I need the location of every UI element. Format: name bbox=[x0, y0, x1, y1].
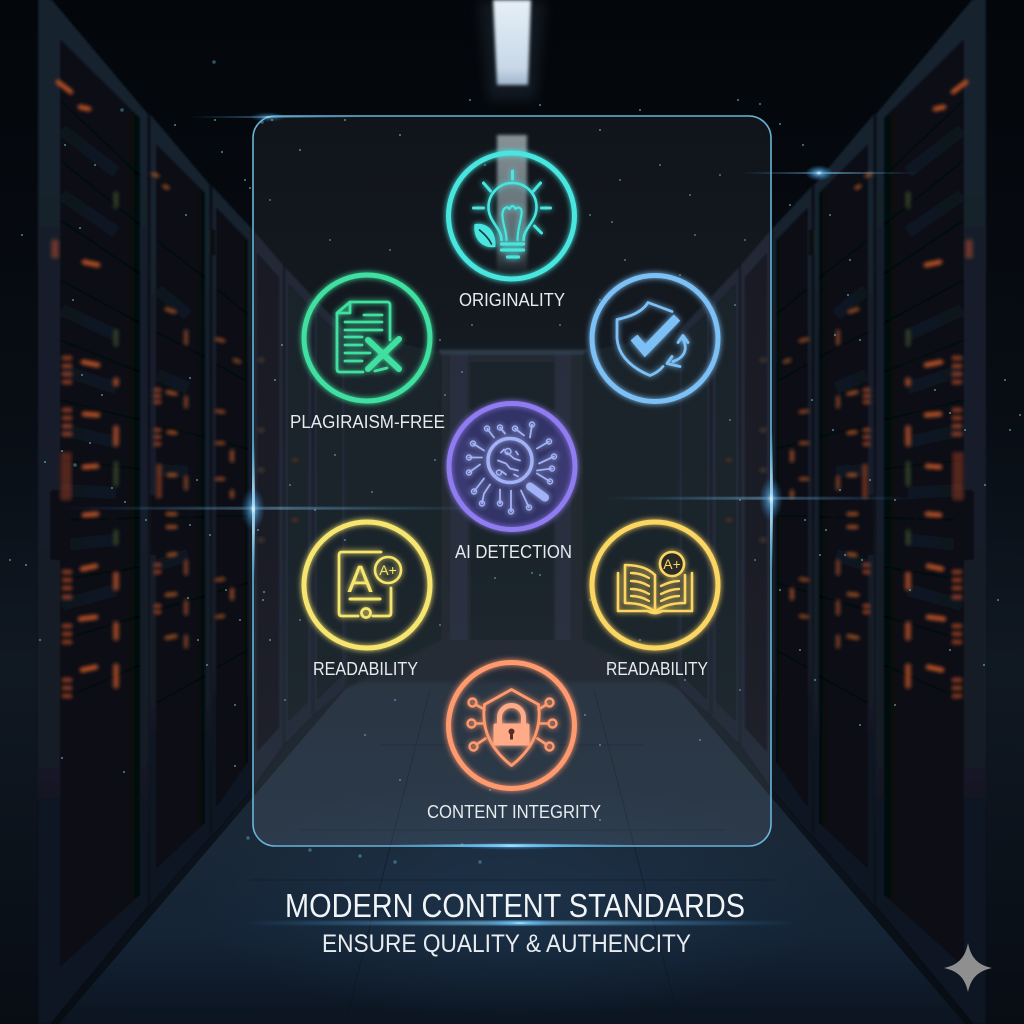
icon: readability tablet: A bbox=[347, 559, 373, 601]
ceiling light bbox=[478, 0, 546, 100]
label: plagiarism-free: PLAGIRAISM-FREE bbox=[290, 412, 445, 432]
glass panel bbox=[253, 116, 771, 846]
light flares on panel edges bbox=[60, 112, 920, 850]
corridor end bbox=[340, 350, 684, 682]
icon: originality lightbulb bbox=[448, 153, 574, 279]
icon: sparkle watermark bbox=[944, 943, 992, 992]
label: readability right: READABILITY bbox=[606, 659, 708, 679]
title underline glow bbox=[240, 920, 800, 926]
label: AI detection: AI DETECTION bbox=[455, 542, 572, 562]
server racks right bbox=[584, 0, 986, 1024]
panel light beam reflection bbox=[497, 135, 527, 275]
icon: readability open book bbox=[592, 522, 718, 648]
icon: AI detection magnifier bbox=[449, 404, 575, 530]
icon: readability open book: A+ bbox=[663, 556, 681, 572]
label: content integrity: CONTENT INTEGRITY bbox=[427, 802, 601, 822]
floating particles bbox=[10, 62, 1020, 862]
title: MODERN CONTENT STANDARDS bbox=[285, 887, 745, 924]
icon: readability tablet: A+ bbox=[379, 562, 397, 578]
icon: content integrity shield and lock bbox=[448, 662, 574, 788]
label: originality: ORIGINALITY bbox=[459, 290, 565, 310]
icon: readability tablet bbox=[304, 522, 430, 648]
floor bbox=[59, 680, 965, 1024]
server racks left bbox=[38, 0, 440, 1024]
label: readability left: READABILITY bbox=[313, 659, 418, 679]
icon: plagiarism-free document bbox=[304, 275, 430, 401]
subtitle: ENSURE QUALITY & AUTHENCITY bbox=[322, 930, 691, 958]
icon: verified shield bbox=[592, 276, 718, 402]
